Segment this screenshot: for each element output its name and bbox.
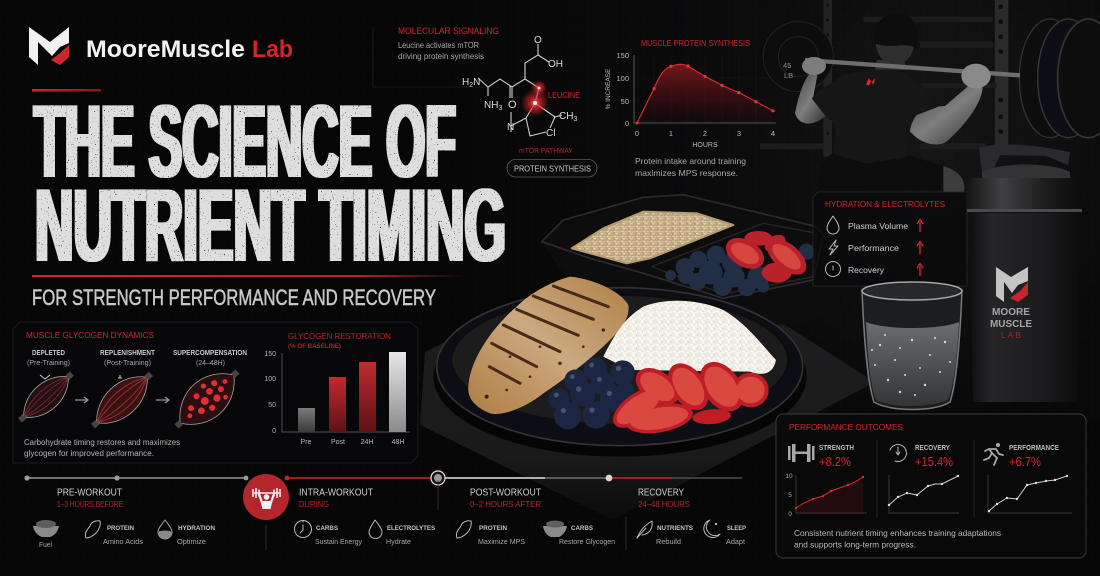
- phase: recovery: 24–48 HOURS: [638, 499, 690, 509]
- metric: performance: +6.7%: [1009, 454, 1041, 469]
- description: driving protein synthesis: [398, 52, 484, 61]
- photo: athlete squatting with barbell: [760, 0, 1100, 192]
- chart: glycogen restoration: [264, 331, 410, 446]
- stage: depleted: (Pre-Training): [27, 360, 70, 367]
- brand logo: Lab: [252, 36, 293, 63]
- phase: intra-workout: INTRA-WORKOUT: [299, 488, 373, 498]
- heading: HYDRATION & ELECTROLYTES: [825, 199, 945, 209]
- chart: muscle protein synthesis: 2: [703, 129, 707, 138]
- phase: recovery: NUTRIENTS: [657, 525, 694, 532]
- phase: intra-workout: ELECTROLYTES: [387, 525, 436, 532]
- chart: glycogen restoration: 24H: [361, 439, 373, 446]
- photo: plate with chicken, rice and berries: [433, 277, 807, 457]
- phase: post-workout: Maximize MPS: [478, 539, 525, 546]
- chart: glycogen restoration: 100: [264, 376, 276, 383]
- chart: muscle protein synthesis: % INCREASE: [605, 68, 612, 109]
- leucine molecule diagram: CH: [559, 111, 573, 122]
- chart: muscle protein synthesis: 3: [737, 129, 741, 138]
- accent bar: [32, 89, 101, 92]
- stage: supercompensation: [163, 350, 251, 441]
- metric: strength: STRENGTH: [819, 445, 854, 452]
- shaker logo: MUSCLE: [990, 318, 1032, 330]
- chart: muscle protein synthesis: 0: [625, 119, 629, 128]
- metric: strength: +8.2%: [819, 454, 851, 469]
- phase: intra-workout: CARBS: [316, 525, 339, 532]
- phase: pre-workout: HYDRATION: [178, 525, 215, 532]
- heading: PERFORMANCE OUTCOMES: [789, 422, 903, 432]
- chart: muscle protein synthesis: 50: [621, 97, 629, 106]
- stage: replenishment: (Post-Training): [104, 360, 151, 367]
- phase: pre-workout: Optimize: [177, 539, 206, 546]
- icon: protein: [456, 521, 471, 538]
- leucine molecule diagram: 2: [469, 82, 473, 89]
- line chart: strength: 10: [785, 473, 793, 480]
- caption: maximizes MPS response.: [635, 168, 738, 178]
- chart: glycogen restoration: 50: [268, 402, 276, 409]
- arrow up: [917, 220, 923, 232]
- leucine molecule diagram: NH: [484, 100, 498, 111]
- icon: bowl: [543, 520, 567, 537]
- row: recovery: Recovery: [848, 265, 885, 275]
- title: THE SCIENCE OF: [34, 84, 456, 200]
- phase: post-workout: 0–2 HOURS AFTER: [470, 499, 541, 509]
- chart: glycogen restoration: Pre: [301, 439, 312, 446]
- brand logo: MooreMuscle: [86, 36, 245, 63]
- caption: glycogen for improved performance.: [24, 449, 154, 458]
- icon: dumbbell: [788, 444, 814, 462]
- stage: supercompensation: (24–48H): [196, 360, 225, 367]
- plate label: 45 LB: 45: [783, 61, 791, 70]
- phase: pre-workout: Amino Acids: [103, 539, 144, 546]
- metric: performance: [984, 443, 1072, 513]
- icon: water drop: [827, 216, 839, 234]
- photo: glass of water: [862, 282, 962, 410]
- arrow up: [917, 242, 923, 254]
- row: performance: Performance: [848, 243, 899, 253]
- leucine molecule diagram: H: [462, 77, 469, 88]
- phase: intra-workout: [294, 488, 436, 546]
- brand logo: [29, 27, 293, 65]
- panel: performance outcomes: [776, 414, 1086, 558]
- stage: depleted: DEPLETED: [32, 350, 65, 357]
- phase: pre-workout: [33, 488, 215, 549]
- icon: recovery timer: [890, 445, 906, 462]
- metric: strength: [785, 444, 867, 518]
- chart: glycogen restoration: (% OF BASELINE): [288, 344, 341, 350]
- stage: depleted: [11, 350, 81, 430]
- row: plasma volume: Plasma Volume: [848, 221, 908, 231]
- stage: replenishment: REPLENISHMENT: [100, 350, 156, 357]
- metric: recovery: [888, 445, 959, 513]
- leucine molecule diagram: OH: [548, 59, 563, 70]
- protein synthesis pill: PROTEIN SYNTHESIS: [514, 164, 591, 174]
- timeline: [24, 468, 742, 550]
- phase: pre-workout: Fuel: [39, 542, 52, 549]
- chart: glycogen restoration: 0: [272, 428, 276, 435]
- panel: muscle glycogen dynamics: [11, 322, 418, 463]
- line chart: performance: [988, 475, 1072, 513]
- metric: recovery: RECOVERY: [915, 445, 950, 452]
- shaker logo: LAB: [1001, 331, 1021, 340]
- phase: recovery: [637, 488, 747, 546]
- line chart: strength: 0: [788, 511, 792, 518]
- caption: Carbohydrate timing restores and maximizes: [24, 438, 180, 447]
- plate label: 45 LB: LB: [784, 71, 793, 80]
- phase: pre-workout: PROTEIN: [107, 525, 134, 532]
- mTOR label: mTOR PATHWAY: [519, 146, 573, 155]
- line chart: recovery: [888, 475, 959, 513]
- metric: recovery: +15.4%: [915, 454, 953, 469]
- chart: glycogen restoration: Post: [331, 439, 345, 446]
- icon: lifter in red circle: [243, 474, 289, 520]
- chart: muscle protein synthesis: 1: [669, 129, 673, 138]
- panel: hydration and electrolytes: [813, 192, 967, 286]
- icon: hydration drop: [158, 520, 172, 539]
- subtitle: FOR STRENGTH PERFORMANCE AND RECOVERY: [32, 285, 436, 310]
- heading: MUSCLE PROTEIN SYNTHESIS: [641, 38, 750, 48]
- chart: muscle protein synthesis: 100: [616, 74, 629, 83]
- caption: Protein intake around training: [635, 156, 746, 166]
- chart: muscle protein synthesis: 150: [616, 51, 629, 60]
- photo: shaker bottle: [967, 145, 1082, 402]
- shaker logo: MOORE: [992, 306, 1030, 318]
- icon: runner: [984, 443, 1003, 465]
- phase: intra-workout: Sustain Energy: [315, 539, 362, 546]
- leucine molecule diagram: N: [473, 77, 480, 88]
- arrow: [75, 397, 88, 403]
- leucine molecule diagram: [462, 35, 577, 139]
- phase: pre-workout: PRE-WORKOUT: [57, 488, 122, 498]
- title: [34, 84, 506, 284]
- photo: meal prep tray: [542, 195, 842, 327]
- arrow: [156, 397, 169, 403]
- leucine molecule diagram: N: [507, 122, 514, 133]
- icon: lightning: [829, 240, 838, 255]
- stage: replenishment: [82, 350, 162, 438]
- chart: glycogen restoration: 48H: [392, 439, 404, 446]
- leucine molecule diagram: O: [508, 99, 517, 111]
- shaker logo: [990, 267, 1032, 340]
- line chart: strength: 5: [788, 492, 792, 499]
- icon: clock: [294, 520, 312, 538]
- title: NUTRIENT TIMING: [35, 168, 506, 284]
- protein synthesis pill: [507, 160, 597, 177]
- timeline marker ring: [428, 468, 448, 488]
- chart: muscle protein synthesis: [605, 38, 776, 178]
- phase: recovery: SLEEP: [727, 525, 747, 532]
- chart: glycogen restoration: 150: [264, 351, 276, 358]
- chart: muscle protein synthesis: HOURS: [692, 142, 718, 149]
- chart: muscle protein synthesis: 0: [635, 129, 639, 138]
- leucine molecule diagram: O: [534, 35, 542, 46]
- panel: molecular signaling: [373, 26, 597, 177]
- description: Leucine activates mTOR: [398, 41, 479, 50]
- phase: intra-workout: DURING: [299, 499, 329, 509]
- metric: performance: PERFORMANCE: [1009, 445, 1059, 452]
- leucine molecule diagram: 3: [498, 105, 502, 112]
- leucine label: LEUCINE: [548, 91, 580, 100]
- icon: electrolytes drop: [369, 520, 382, 538]
- leucine molecule diagram: Cl: [546, 128, 555, 139]
- icon: timer: [826, 262, 840, 276]
- line chart: strength: [785, 473, 867, 518]
- title rule: [32, 275, 467, 277]
- heading: MUSCLE GLYCOGEN DYNAMICS: [26, 330, 154, 340]
- phase: post-workout: PROTEIN: [479, 525, 507, 532]
- icon: protein: [85, 521, 100, 538]
- phase: recovery: RECOVERY: [638, 488, 684, 498]
- icon: moon and star: [704, 520, 720, 538]
- leucine molecule diagram: 3: [573, 116, 577, 123]
- phase: post-workout: [456, 488, 615, 546]
- arrow up: [917, 264, 923, 276]
- icon: leaf: [637, 521, 652, 538]
- chart: muscle protein synthesis: 4: [771, 129, 775, 138]
- phase: recovery: Adapt: [726, 539, 745, 546]
- caption: Consistent nutrient timing enhances training adaptations: [794, 528, 1001, 538]
- phase: intra-workout: Hydrate: [386, 539, 411, 546]
- phase: pre-workout: 1–3 HOURS BEFORE: [57, 499, 123, 509]
- phase: post-workout: CARBS: [571, 525, 594, 532]
- stage: supercompensation: SUPERCOMPENSATION: [173, 350, 247, 357]
- phase: recovery: Rebuild: [656, 539, 681, 546]
- phase: post-workout: POST-WORKOUT: [470, 488, 541, 498]
- chart: glycogen restoration: GLYCOGEN RESTORATION: [288, 331, 391, 341]
- heading: MOLECULAR SIGNALING: [398, 26, 499, 36]
- icon: bowl: [33, 520, 59, 537]
- photo: stone slab: [420, 305, 875, 520]
- phase: post-workout: Restore Glycogen: [559, 539, 615, 546]
- caption: and supports long-term progress.: [794, 540, 916, 550]
